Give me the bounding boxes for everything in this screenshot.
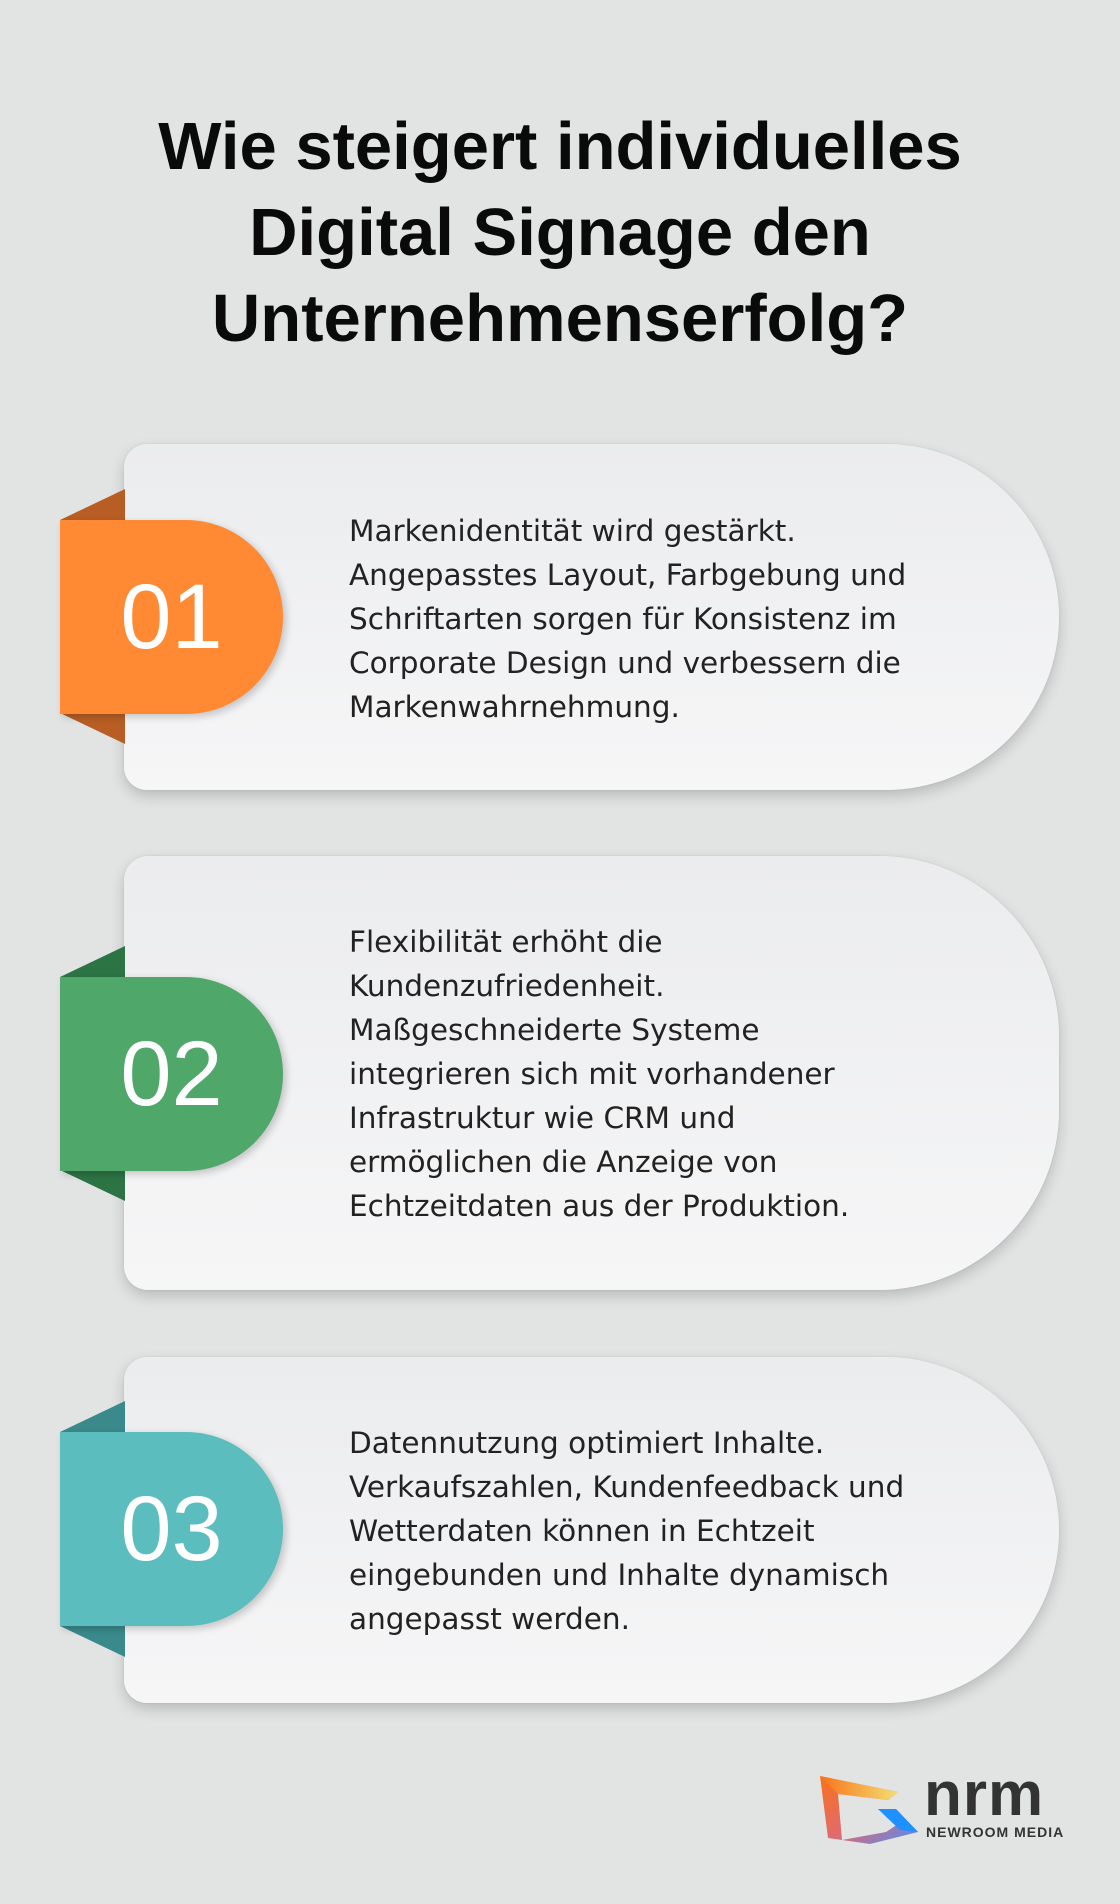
text 3: eingebunden und Inhalte dynamisch — [349, 1558, 889, 1592]
number tab 03: 03 — [120, 1478, 223, 1580]
panel: card 1 — [124, 444, 1059, 790]
text 3 — [349, 1426, 904, 1636]
number tab 02: 02 — [120, 1023, 223, 1125]
text 1: Angepasstes Layout, Farbgebung und — [349, 558, 906, 592]
icon: logo mark — [820, 1776, 918, 1844]
fold bottom 1 — [62, 714, 125, 744]
number tab 02 — [60, 977, 283, 1171]
text 2 — [349, 925, 849, 1223]
title: Wie steigert individuelles — [158, 109, 962, 184]
fold bottom 2 — [62, 1171, 125, 1201]
logo: NEWROOM MEDIA — [926, 1824, 1064, 1840]
title: Digital Signage den — [249, 195, 871, 270]
text 1: Corporate Design und verbessern die — [349, 646, 901, 680]
text 3: angepasst werden. — [349, 1602, 630, 1636]
number tab 01: 01 — [120, 566, 223, 668]
text 2: integrieren sich mit vorhandener — [349, 1057, 835, 1091]
title — [158, 109, 962, 356]
text 2: Echtzeitdaten aus der Produktion. — [349, 1189, 849, 1223]
panel: card 2 — [124, 856, 1059, 1290]
fold top 1 — [60, 489, 125, 520]
fold top 2 — [60, 946, 125, 977]
text 2: Kundenzufriedenheit. — [349, 969, 664, 1003]
text 3: Verkaufszahlen, Kundenfeedback und — [349, 1470, 904, 1504]
number tab 01 — [60, 520, 283, 714]
text 1: Markenidentität wird gestärkt. — [349, 514, 796, 548]
text 2: ermöglichen die Anzeige von — [349, 1145, 777, 1179]
fold top 3 — [60, 1401, 125, 1432]
text 1: Markenwahrnehmung. — [349, 690, 680, 724]
logo — [820, 1760, 1064, 1844]
text 2: Flexibilität erhöht die — [349, 925, 663, 959]
text 1 — [349, 514, 906, 724]
panel: card 3 — [124, 1357, 1059, 1703]
number tab 03 — [60, 1432, 283, 1626]
logo text: nrm — [924, 1760, 1044, 1829]
text 3: Datennutzung optimiert Inhalte. — [349, 1426, 824, 1460]
text 1: Schriftarten sorgen für Konsistenz im — [349, 602, 897, 636]
text 3: Wetterdaten können in Echtzeit — [349, 1514, 815, 1548]
text 2: Maßgeschneiderte Systeme — [349, 1013, 760, 1047]
fold bottom 3 — [60, 1626, 125, 1657]
text 2: Infrastruktur wie CRM und — [349, 1101, 736, 1135]
title: Unternehmenserfolg? — [212, 281, 908, 356]
